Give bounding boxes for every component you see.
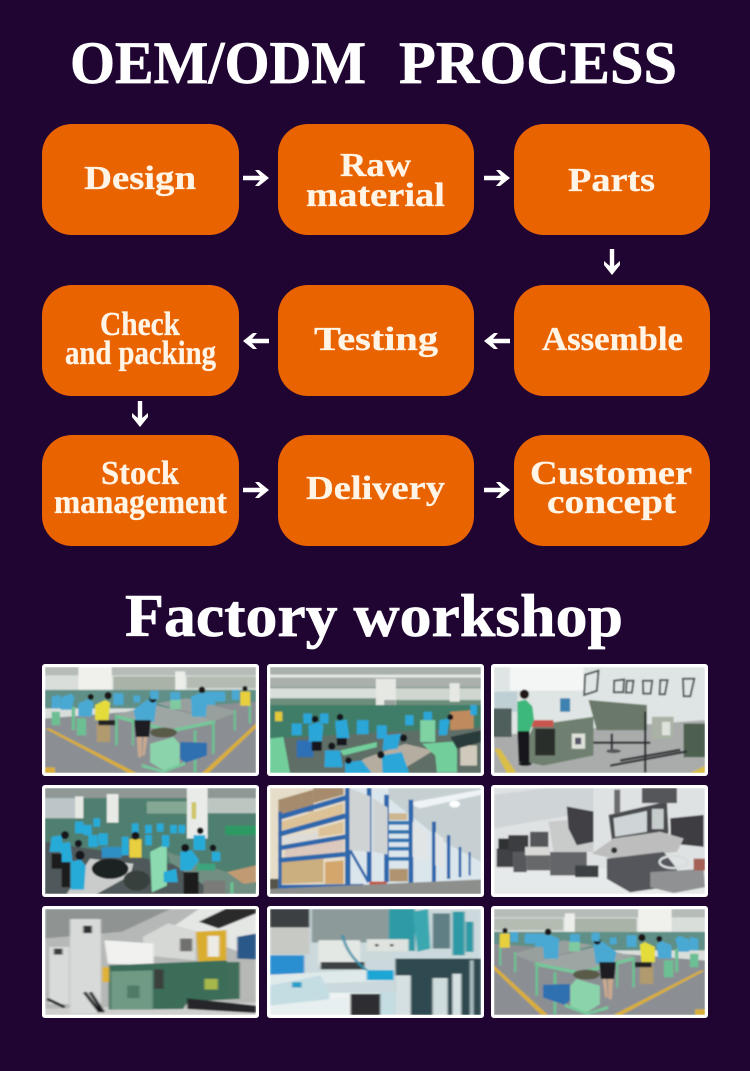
photo: teal automated machine bbox=[267, 906, 484, 1018]
arrow: delivery to customer concept bbox=[484, 482, 510, 498]
photo: green die-casting machine bbox=[42, 906, 259, 1018]
process step: Design: Design bbox=[84, 160, 196, 197]
process step: Testing bbox=[278, 285, 474, 396]
process step: Parts: Parts bbox=[568, 162, 655, 199]
photo: grey wire-cutting machines bbox=[491, 785, 708, 897]
process step: Stock management: management bbox=[54, 484, 228, 521]
photo: operator at grey-green machines bbox=[491, 664, 708, 776]
process step: Stock management bbox=[42, 435, 239, 546]
title bbox=[70, 30, 677, 96]
process step: Customer concept bbox=[514, 435, 710, 546]
process step: Testing: Testing bbox=[314, 321, 438, 358]
process step: Raw material: Raw bbox=[340, 147, 411, 184]
title: PROCESS bbox=[399, 30, 677, 96]
arrow: assemble to testing bbox=[484, 333, 510, 349]
process step: Parts bbox=[514, 124, 710, 235]
arrow: testing to check and packing bbox=[243, 333, 269, 349]
process step: Check and packing: and packing bbox=[65, 335, 216, 372]
heading: Factory workshop: Factory workshop bbox=[125, 583, 623, 649]
photo: warehouse shelving bbox=[267, 785, 484, 897]
process step: Delivery bbox=[278, 435, 474, 546]
arrow: design to raw material bbox=[243, 170, 269, 186]
arrow: parts to assemble bbox=[604, 249, 620, 275]
arrow: check and packing to stock management bbox=[132, 401, 148, 427]
process step: Delivery: Delivery bbox=[306, 470, 445, 507]
process step: Customer concept: Customer bbox=[530, 455, 692, 492]
arrow: stock management to delivery bbox=[243, 482, 269, 498]
process step: Raw material bbox=[278, 124, 474, 235]
arrow: raw material to parts bbox=[484, 170, 510, 186]
photo: workers at conveyor line bbox=[42, 785, 259, 897]
process step: Check and packing bbox=[42, 285, 239, 396]
process step: Assemble bbox=[514, 285, 710, 396]
process step: Customer concept: concept bbox=[547, 484, 677, 521]
process step: Design bbox=[42, 124, 239, 235]
photo: assembly line with workers at green benches bbox=[42, 664, 259, 776]
title: OEM/ODM bbox=[70, 30, 366, 96]
process step: Assemble: Assemble bbox=[542, 321, 683, 358]
process step: Raw material: material bbox=[306, 177, 445, 214]
photo: assembly line, reverse view bbox=[491, 906, 708, 1018]
process step: Check and packing: Check bbox=[100, 306, 180, 343]
process step: Stock management: Stock bbox=[101, 455, 179, 492]
photo: wide workshop floor bbox=[267, 664, 484, 776]
